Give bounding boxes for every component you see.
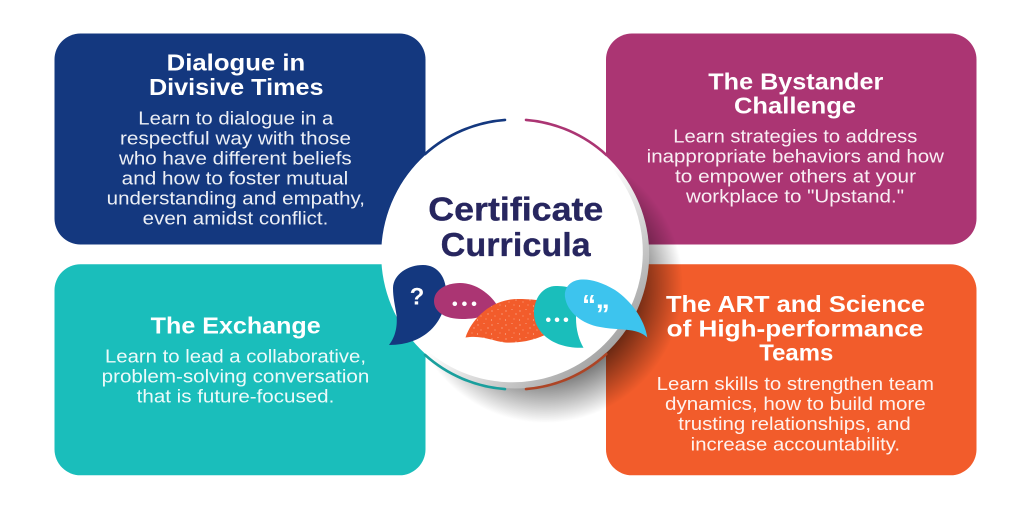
icon: teal bubble with dots: ••• [546, 312, 572, 329]
heading: Dialogue in Divisive Times: Divisive Times [149, 74, 324, 100]
icon: magenta bubble with dots: ••• [452, 296, 481, 313]
icon: orange speckled bubble [466, 299, 545, 343]
heading: Dialogue in Divisive Times [149, 50, 324, 100]
icon: light blue bubble with quotes [565, 279, 647, 338]
text block: Dialogue description: and how to foster mutual [122, 167, 348, 188]
text block: Bystander description: Learn strategies to address [673, 126, 917, 147]
text block: Dialogue description: even amidst conflict. [143, 208, 328, 229]
heading: Dialogue in Divisive Times: Dialogue in [167, 50, 305, 76]
text block: Exchange description: Learn to lead a collaborative, [105, 346, 366, 367]
icon: teal bubble with dots [534, 286, 584, 348]
arc: magenta [526, 120, 606, 155]
arc: rust [526, 354, 606, 389]
text block: Dialogue description: Learn to dialogue in a [138, 107, 334, 128]
heading: The ART and Science of High-performance Teams [666, 291, 925, 366]
text block: Dialogue description [107, 107, 365, 229]
text block: Exchange description [102, 346, 369, 407]
title: Certificate Curricula: Certificate [428, 191, 603, 228]
text block: Bystander description [647, 126, 945, 207]
icon: light blue bubble with quotes: ” [596, 298, 610, 330]
text block: High-performance description: trusting relationships, and [678, 413, 911, 434]
drop shadow of the central circle [407, 147, 683, 423]
heading: The Bystander Challenge: Challenge [734, 92, 856, 118]
heading: The Bystander Challenge: The Bystander [708, 68, 883, 94]
icon: light blue bubble with quotes: “ [582, 289, 596, 320]
text block: High-performance description: Learn skills to strengthen team [657, 373, 934, 394]
text block: Dialogue description: who have different beliefs [118, 147, 352, 168]
title: Certificate Curricula [428, 191, 603, 263]
panel: The Bystander Challenge [606, 34, 976, 244]
arc: navy [425, 120, 505, 154]
text block: High-performance description [657, 373, 934, 454]
text block: Exchange description: problem-solving conversation [102, 366, 369, 387]
text block: High-performance description: dynamics, how to build more [665, 393, 926, 414]
text block: Bystander description: to empower others at your [675, 166, 916, 187]
heading: The Bystander Challenge [708, 68, 883, 118]
arc: teal [425, 355, 505, 389]
text block: Bystander description: workplace to "Upstand." [685, 186, 904, 207]
text block: Dialogue description: respectful way with those [120, 127, 351, 148]
central circle [381, 120, 649, 389]
icon: magenta bubble with dots [434, 283, 497, 319]
icon: navy bubble with question mark [389, 265, 446, 345]
text block: Dialogue description: understanding and empathy, [107, 187, 365, 208]
text block: Exchange description: that is future-focused. [137, 386, 334, 407]
heading: The ART and Science of High-performance Teams: The ART and Science [666, 291, 925, 317]
panel: The ART and Science of High-performance Teams [606, 264, 976, 475]
title: Certificate Curricula: Curricula [441, 226, 591, 263]
heading: The Exchange: The Exchange [151, 312, 321, 338]
icon: speech bubbles [389, 265, 647, 348]
panel: The Exchange [54, 264, 426, 475]
icon: navy bubble with question mark: ? [410, 284, 424, 310]
heading: The ART and Science of High-performance Teams: Teams [759, 340, 833, 366]
panel: Dialogue in Divisive Times [54, 34, 426, 244]
heading: The ART and Science of High-performance Teams: of High-performance [667, 316, 923, 342]
text block: High-performance description: increase accountability. [691, 433, 900, 454]
text block: Bystander description: inappropriate behaviors and how [647, 146, 945, 167]
